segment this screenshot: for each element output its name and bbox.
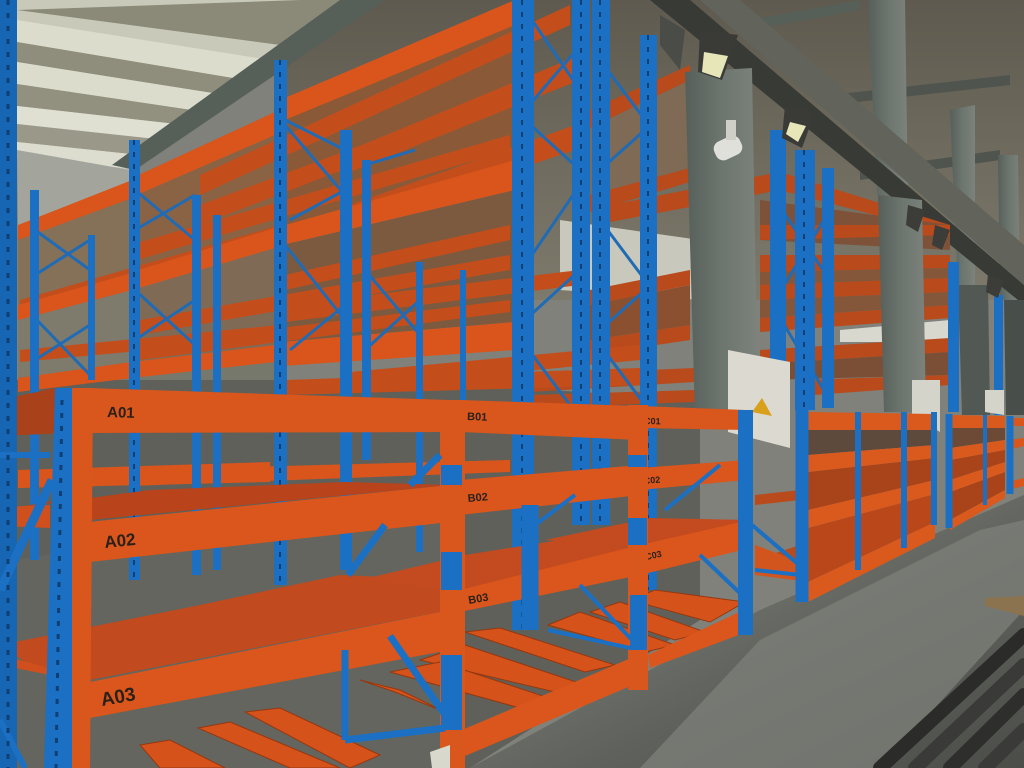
- shelf beams: A row: A03: [99, 684, 137, 711]
- tall rack: front beams: [18, 0, 515, 488]
- steel pipes on floor: [880, 635, 1024, 768]
- tall rack: shelf undersides: [18, 25, 515, 378]
- front rack: blue frame and uprights: [0, 0, 753, 768]
- middle front rack, right of the column: [752, 410, 935, 602]
- floor reflection: [640, 520, 1024, 768]
- bottom slats: [140, 590, 745, 768]
- box: electrical cabinet two: [912, 380, 940, 432]
- front rack section: shelf decks: [0, 388, 750, 680]
- shelf beams: A row: A02: [103, 530, 136, 552]
- timber stack: [985, 596, 1024, 616]
- roof girder: [650, 0, 1024, 305]
- shelf beams: B row: B02: [467, 491, 488, 505]
- shelf beams: C row: C03: [644, 549, 663, 562]
- back orange shelving, right section: [530, 65, 950, 408]
- concrete columns in front of shelving: [685, 68, 1024, 415]
- tall rack: back beams: [20, 5, 640, 395]
- shelf beams: A row: A01: [107, 404, 135, 422]
- box: electrical cabinet three: [985, 390, 1004, 415]
- shelf beams: B row: [460, 400, 645, 756]
- shelf beams: C row: [640, 406, 752, 668]
- tall rack: blue uprights and braces: [30, 0, 1003, 630]
- shelf beams: A row: [0, 388, 450, 718]
- shelf beams: B row: B01: [467, 411, 487, 424]
- shelf beams: C row: C01: [644, 416, 661, 426]
- security camera and flood lights: [660, 15, 1004, 298]
- far front rack, right: [949, 414, 1024, 530]
- shelf beams: C row: C02: [643, 475, 661, 486]
- upper column shafts: [868, 0, 1020, 300]
- box: electrical cabinet: [728, 350, 790, 448]
- shelf beams: B row: B03: [467, 592, 489, 607]
- floor: [470, 495, 1024, 768]
